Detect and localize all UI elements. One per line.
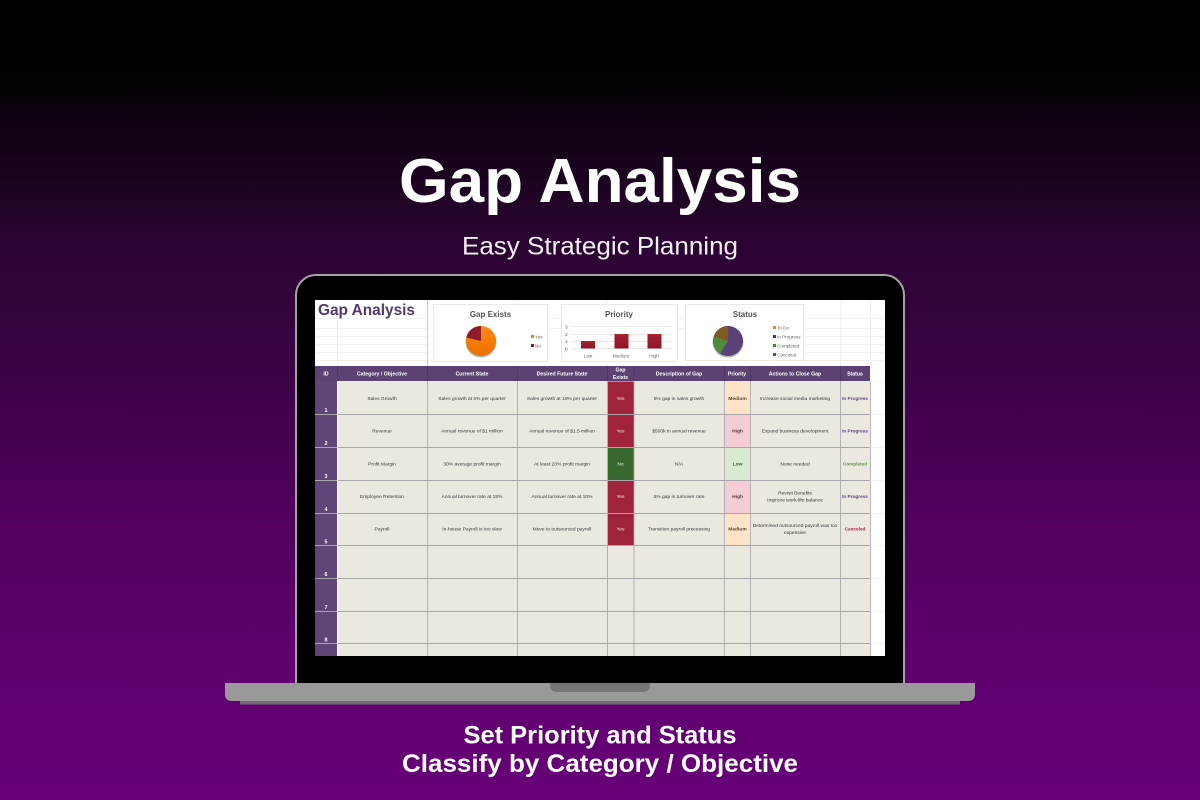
table header: Actions to Close Gap [769,372,821,378]
chart: status pie: Status [733,310,758,319]
row 1: In Progress [842,396,868,401]
footer text: Classify by Category / Objective [402,750,798,778]
laptop [225,275,975,704]
row 3: 30% average profit margin [443,462,501,468]
sheet heading: Gap Analysis [318,302,415,319]
table header [315,366,870,382]
footer text: Set Priority and Status [464,722,736,750]
row 5: Move to outsourced payroll [533,526,591,532]
row 1: 5% gap in sales growth [654,396,705,402]
table header: Description of Gap [656,372,702,378]
row 4 [360,490,868,504]
chart: priority bars: 3 [565,324,568,330]
row 5: In-house Payroll is too slow [442,526,502,532]
chart: status pie [686,304,804,360]
row 5: Payroll [375,526,389,532]
id column: 4 [324,507,328,513]
chart: priority bars: 1 [565,339,568,345]
chart: gap exists pie: Gap Exists [470,310,512,319]
row 1 [367,396,868,402]
table header: Gap [615,368,626,374]
row 5: Yes [617,526,625,532]
row 5 [375,523,866,536]
laptop base shadow [240,701,960,704]
row 5: expensive [784,530,806,536]
row 5: Transition payroll processing [648,526,710,532]
table header: Desired Future State [537,372,587,378]
id column: 2 [324,441,328,447]
row 5: Medium [728,526,747,532]
chart: status pie: Canceled [777,352,797,357]
row 3: Profit Margin [368,462,396,468]
row 5: Canceled [845,526,866,532]
row 4: Improve work-life balance [767,498,823,504]
chart: priority bars [562,304,678,362]
row 3: N/A [675,462,684,468]
row 2 [372,428,868,434]
row 1: Sales Growth [367,396,397,402]
title: Gap Analysis [399,147,801,216]
row 1: Sales growth at 10% per quarter [527,396,597,402]
row 2: Expand business development [762,428,829,434]
row 3: No [617,462,624,468]
table grid lines [315,414,870,644]
laptop lid and bezel [296,275,904,684]
subtitle: Easy Strategic Planning [462,232,738,260]
gap exists cells [608,382,634,546]
row 5: Determined outsourced payroll was too [753,523,838,529]
chart: gap exists pie: Yes [535,334,543,339]
row 1: Increase social media marketing [760,396,830,402]
id column: 8 [324,638,328,644]
row 4: In Progress [842,494,868,499]
row 2: Annual revenue of $1 million [441,428,503,434]
chart: gap exists pie: No [535,343,541,348]
row 2: Revenue [372,428,392,434]
chart: gap exists pie [434,304,548,362]
chart: status pie: In Progress [777,334,801,339]
id column [315,381,337,656]
table header: Current State [456,372,489,378]
id column: 5 [324,540,328,546]
row 3: None needed [780,462,810,468]
row 2: Annual revenue of $1.5 million [529,428,595,434]
id column: 1 [324,408,328,414]
table header: Priority [728,372,746,378]
row 1: Yes [617,396,625,402]
table header: Category / Objective [357,372,407,378]
id column: 3 [324,474,328,480]
chart: priority bars: Low [584,354,593,358]
table header: Status [847,372,863,378]
chart: priority bars: Medium [613,354,629,358]
row 3: Completed [843,462,867,466]
table header: Exists [613,375,628,381]
row 3: At least 20% profit margin [534,462,590,468]
row 3: Low [733,462,743,468]
row 1: Medium [728,396,747,402]
row 1: Sales growth at 5% per quarter [438,396,506,402]
chart: priority bars: 0 [565,346,568,352]
row 2: Yes [617,428,625,434]
row 2: In Progress [842,428,868,434]
row 4: High [732,494,743,500]
chart: priority bars: 2 [565,332,568,338]
spreadsheet screen [315,300,885,656]
row 3 [368,462,867,468]
chart: status pie: Completed [777,343,800,348]
id column: 7 [324,605,328,611]
table header: ID [323,372,329,378]
row 4: Yes [617,494,625,500]
footer text [402,722,798,778]
chart: priority bars: High [649,354,659,358]
row 4: Annual turnover rate at 10% [532,494,593,500]
row 4: 5% gap in turnover rate [654,494,705,500]
laptop notch [550,683,650,692]
chart: status pie: To Do [777,325,789,330]
id column: 6 [324,572,328,578]
faint sheet grid lines [315,300,885,366]
row 2: $500k in annual revenue [652,428,706,434]
row 4: Revisit Benefits [778,490,812,496]
row 4: Annual turnover rate at 15% [442,494,503,500]
laptop base [225,683,975,701]
priority cells [725,382,750,546]
row 2: High [732,428,743,434]
chart: priority bars: Priority [605,310,634,319]
row 4: Employee Retention [360,494,404,500]
table body background [337,381,870,656]
